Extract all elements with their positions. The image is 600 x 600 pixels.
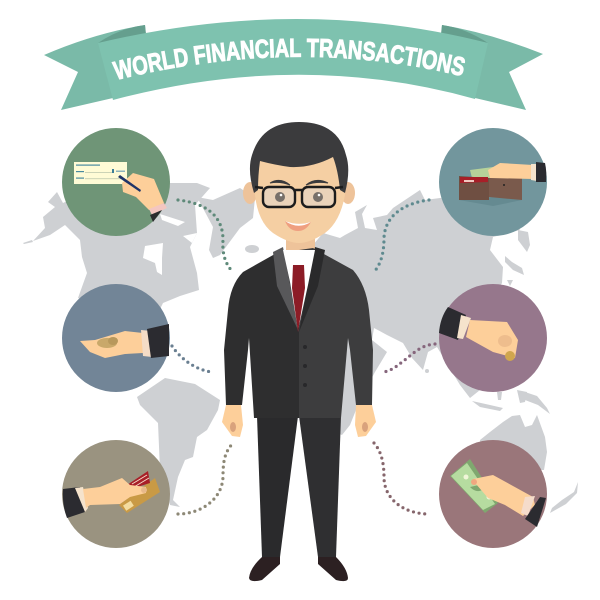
neck (286, 232, 315, 262)
hands (222, 405, 376, 437)
man (222, 122, 376, 581)
banner band (98, 19, 488, 100)
trousers (257, 416, 341, 557)
banner (44, 19, 543, 110)
banner left tail (44, 25, 147, 110)
ears (243, 182, 355, 204)
panel: coins (62, 284, 170, 392)
icon: hand with wallet (459, 162, 546, 206)
panel: check (62, 128, 170, 236)
eyebrows (270, 180, 328, 185)
title: WORLD FINANCIAL TRANSACTIONS (112, 38, 466, 80)
connector: coins (172, 346, 212, 372)
glasses (255, 187, 343, 207)
jacket (224, 247, 373, 418)
panel: wallet (439, 128, 547, 236)
water cut-outs (143, 243, 163, 275)
panel: coin (439, 284, 547, 392)
face (255, 145, 345, 243)
icon: hand with cash (450, 459, 546, 527)
connector: card (178, 443, 233, 514)
hair (250, 122, 348, 193)
connector: cash (374, 443, 429, 514)
connector: coin (382, 344, 435, 372)
mouth (285, 221, 311, 231)
connector: wallet (374, 200, 429, 272)
banner right tail (440, 25, 543, 110)
shoes (249, 557, 348, 581)
panel: card (62, 440, 170, 548)
tie (292, 265, 305, 332)
world map (23, 183, 578, 513)
icon: open hand with coins (80, 324, 169, 358)
icon: writing hand (118, 173, 167, 222)
panel: cash (439, 440, 547, 548)
icon: hand with coin (439, 307, 518, 361)
shirt (283, 250, 315, 330)
icon: check (74, 162, 127, 184)
icon: hand with cards (63, 471, 160, 518)
connector: check (178, 200, 233, 272)
